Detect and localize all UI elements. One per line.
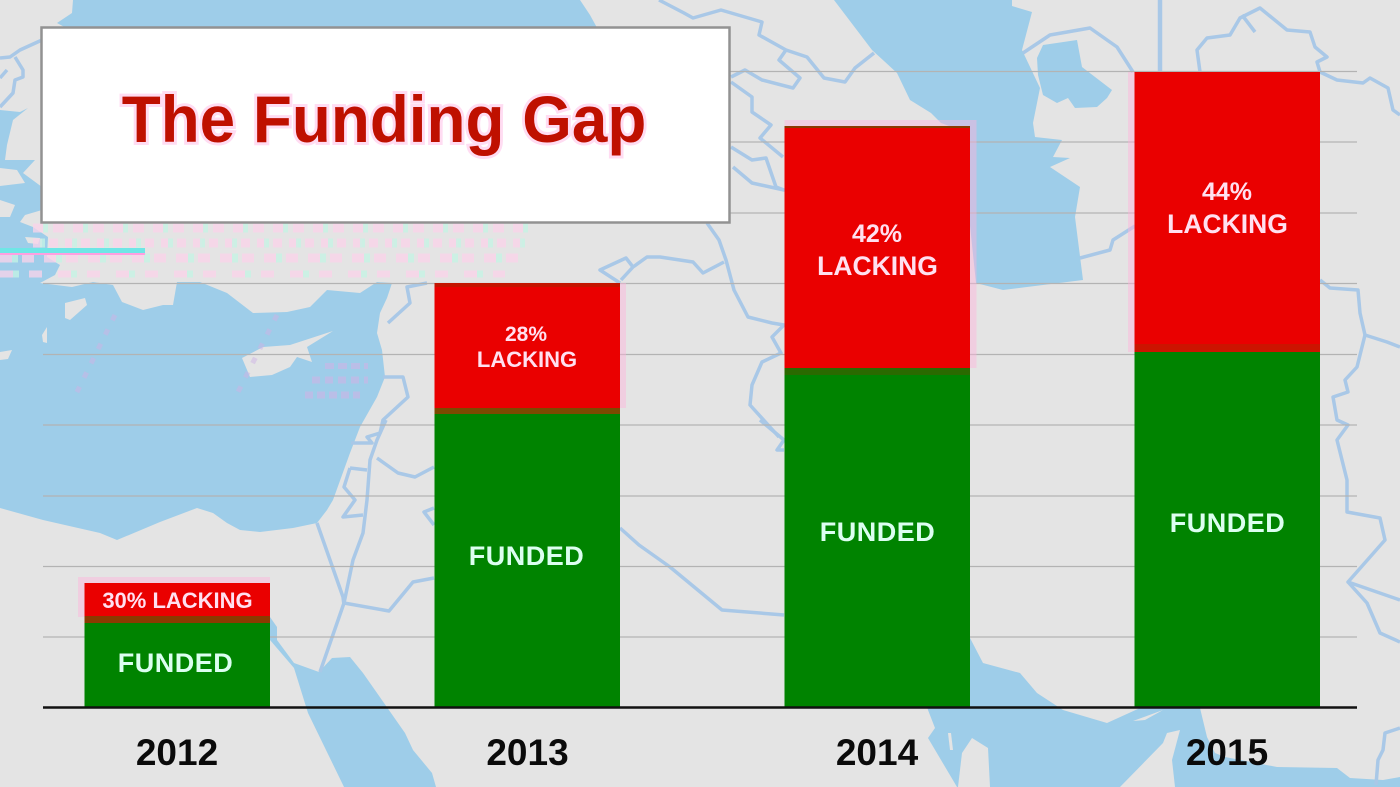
Black Sea xyxy=(57,0,601,60)
title box xyxy=(42,28,730,222)
label: funded 2015: FUNDED xyxy=(1170,508,1285,538)
label: 44% lacking: 44% xyxy=(1202,178,1252,206)
year labels xyxy=(136,732,1268,773)
year labels: 2015 xyxy=(1186,732,1268,773)
grid lines xyxy=(43,72,1357,637)
Persian Gulf xyxy=(925,638,1400,787)
label: funded 2014: FUNDED xyxy=(820,517,935,547)
bar 2015 xyxy=(1128,72,1320,707)
baseline axis xyxy=(43,706,1357,709)
Islands xyxy=(0,168,333,377)
year labels: 2013 xyxy=(486,732,569,773)
label: 42% lacking: 42% xyxy=(852,220,902,248)
Caspian Sea xyxy=(834,0,1083,290)
label: 28% lacking: 28% xyxy=(505,323,547,346)
bar 2014 xyxy=(784,120,976,707)
Gulf land and islands xyxy=(948,710,1180,787)
bar 2015: LACKING xyxy=(1167,209,1288,239)
label: funded 2013: FUNDED xyxy=(469,541,584,571)
bar 2013: LACKING xyxy=(477,347,577,372)
bar 2013 xyxy=(434,283,626,707)
label: 30% lacking: 30% LACKING xyxy=(102,588,253,613)
bar 2012 xyxy=(78,577,270,707)
Gulf of Suez, Gulf of Aqaba and Red Sea xyxy=(260,610,436,787)
Aral Sea xyxy=(1037,40,1112,108)
year labels: 2012 xyxy=(136,732,218,773)
bar 2014: LACKING xyxy=(817,251,938,281)
Aegean and Mediterranean xyxy=(0,108,392,540)
label: funded 2012: FUNDED xyxy=(118,648,233,678)
title: The Funding Gap xyxy=(122,82,646,156)
year labels: 2014 xyxy=(836,732,919,773)
